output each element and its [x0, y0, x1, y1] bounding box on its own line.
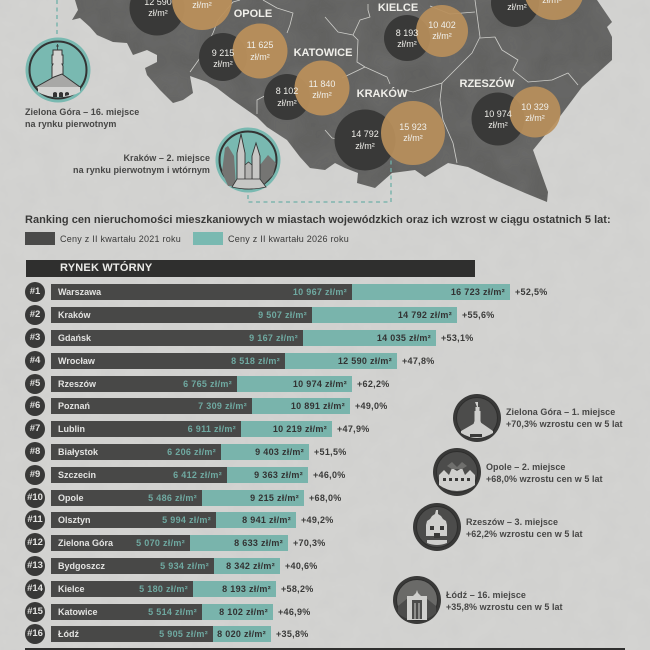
- bubbles: Katowice: 11 840: [309, 79, 335, 89]
- map of Poland: [72, 0, 612, 202]
- row 15 Katowice: +46,9%: [278, 606, 311, 616]
- note: Łódź growth: Łódź – 16. miejsce: [446, 590, 526, 600]
- note: Łódź growth: [446, 590, 563, 612]
- row 9 Szczecin: #9: [30, 469, 40, 480]
- row 8 Białystok: #8: [30, 446, 40, 457]
- icon: Rzeszów, gray: [413, 503, 461, 551]
- row 16 Łódź: Łódź: [58, 629, 79, 639]
- row 12 Zielona Góra: 5 070 zł/m²: [136, 538, 185, 548]
- row 8 Białystok: +51,5%: [314, 447, 347, 457]
- row 6 Poznań: [25, 396, 388, 416]
- row 4 Wrocław: 12 590 zł/m²: [338, 356, 392, 366]
- row 3 Gdańsk: #3: [30, 332, 40, 343]
- row 11 Olsztyn: 5 994 zł/m²: [162, 515, 211, 525]
- row 7 Lublin: [25, 419, 370, 439]
- row 3 Gdańsk: [25, 328, 474, 348]
- bubbles: Opole: [199, 8, 288, 81]
- row 13 Bydgoszcz: 8 342 zł/m²: [226, 561, 275, 571]
- row 1 Warszawa: 10 967 zł/m²: [293, 287, 347, 297]
- row 5 Rzeszów: +62,2%: [357, 378, 390, 388]
- row 1 Warszawa: Warszawa: [58, 287, 101, 297]
- row 7 Lublin: #7: [30, 423, 40, 434]
- bubbles: Opole: 9 215: [212, 48, 234, 58]
- row 13 Bydgoszcz: Bydgoszcz: [58, 561, 105, 571]
- row 10 Opole: +68,0%: [309, 492, 342, 502]
- row 16 Łódź: 8 020 zł/m²: [217, 629, 266, 639]
- bubbles: Rzeszów: 10 974: [484, 109, 512, 119]
- row 2 Kraków: 9 507 zł/m²: [258, 310, 307, 320]
- row 13 Bydgoszcz: [25, 556, 318, 576]
- row 14 Kielce: Kielce: [58, 584, 85, 594]
- row 9 Szczecin: Szczecin: [58, 470, 96, 480]
- row 12 Zielona Góra: 8 633 zł/m²: [234, 538, 283, 548]
- bubbles: Opole: OPOLE: [234, 8, 272, 20]
- bubbles: Katowice: zł/m²: [277, 98, 297, 108]
- bubbles: Opole: 11 625: [247, 40, 273, 50]
- row 10 Opole: 9 215 zł/m²: [250, 492, 299, 502]
- bubbles: Kielce: zł/m²: [432, 31, 452, 41]
- icon: Zielona Góra, gray: [453, 394, 501, 442]
- bubbles: Rzeszów: zł/m²: [488, 120, 508, 130]
- bubbles: top right city: [491, 0, 584, 27]
- note: Rzeszów growth: Rzeszów – 3. miejsce: [466, 517, 558, 527]
- row 15 Katowice: 5 514 zł/m²: [148, 606, 197, 616]
- row 14 Kielce: +58,2%: [281, 584, 314, 594]
- row 16 Łódź: 5 905 zł/m²: [159, 629, 208, 639]
- row 16 Łódź: +35,8%: [276, 629, 309, 639]
- note: Opole growth: Opole – 2. miejsce: [486, 462, 565, 472]
- bubbles: Kielce: KIELCE: [378, 2, 418, 14]
- row 15 Katowice: 8 102 zł/m²: [219, 606, 268, 616]
- row 5 Rzeszów: Rzeszów: [58, 378, 96, 388]
- row 5 Rzeszów: 6 765 zł/m²: [183, 378, 232, 388]
- row 10 Opole: #10: [27, 492, 43, 502]
- row 11 Olsztyn: [25, 510, 334, 530]
- bubbles: top left city: [130, 0, 232, 36]
- row 1 Warszawa: +52,5%: [515, 287, 548, 297]
- note: Zielona Góra growth: +70,3% wzrostu cen w 5 lat: [506, 419, 623, 429]
- row 2 Kraków: 14 792 zł/m²: [398, 310, 452, 320]
- note: Rzeszów growth: +62,2% wzrostu cen w 5 lat: [466, 529, 583, 539]
- row 16 Łódź: [25, 624, 309, 644]
- bottom section bar: [25, 648, 625, 650]
- row 6 Poznań: Poznań: [58, 401, 90, 411]
- row 10 Opole: [25, 488, 342, 508]
- bubbles: Kielce: 10 402: [428, 20, 456, 30]
- row 5 Rzeszów: #5: [30, 378, 40, 388]
- note: Zielona Góra growth: Zielona Góra – 1. miejsce: [506, 407, 615, 417]
- note: Opole growth: +68,0% wzrostu cen w 5 lat: [486, 474, 603, 484]
- row 7 Lublin: Lublin: [58, 424, 85, 434]
- note: Rzeszów growth: [466, 517, 583, 539]
- row 8 Białystok: [25, 442, 347, 462]
- bubbles: Kraków: KRAKÓW: [357, 87, 408, 100]
- bubbles: Opole: zł/m²: [213, 59, 233, 69]
- bubbles: Rzeszów: [460, 77, 560, 146]
- row 13 Bydgoszcz: 5 934 zł/m²: [160, 561, 209, 571]
- row 12 Zielona Góra: #12: [27, 537, 43, 548]
- row 3 Gdańsk: +53,1%: [441, 333, 474, 343]
- bubbles: Rzeszów: zł/m²: [525, 113, 545, 123]
- bubbles: Kraków: zł/m²: [403, 133, 423, 143]
- legend: Ceny z II kwartału 2026 roku: [228, 234, 349, 244]
- bubbles: top left city: zł/m²: [148, 8, 168, 18]
- row 2 Kraków: Kraków: [58, 310, 91, 320]
- ranking title: Ranking cen nieruchomości mieszkaniowych w miastach wojewódzkich oraz ich wzrost w ciągu ostatnich 5 lat:: [25, 214, 611, 226]
- note: Zielona Góra growth: [506, 407, 623, 429]
- row 15 Katowice: #15: [27, 606, 43, 616]
- dashed connector: Kraków: [248, 160, 391, 202]
- note: Opole growth: [486, 462, 603, 484]
- dashed connector: Zielona Góra: [56, 0, 58, 35]
- row 8 Białystok: 6 206 zł/m²: [167, 447, 216, 457]
- row 9 Szczecin: 9 363 zł/m²: [254, 470, 303, 480]
- bubbles: Kraków: [334, 87, 445, 170]
- row 7 Lublin: +47,9%: [337, 424, 370, 434]
- row 11 Olsztyn: #11: [27, 514, 43, 525]
- row 14 Kielce: 8 193 zł/m²: [222, 584, 271, 594]
- row 4 Wrocław: #4: [30, 355, 40, 366]
- row 5 Rzeszów: [25, 374, 390, 394]
- row 15 Katowice: [25, 602, 311, 622]
- icon: Kraków basilica, teal: [216, 128, 280, 192]
- row 4 Wrocław: 8 518 zł/m²: [231, 356, 280, 366]
- row 7 Lublin: 10 219 zł/m²: [273, 424, 327, 434]
- row 10 Opole: 5 486 zł/m²: [148, 492, 197, 502]
- caption: Kraków primary and secondary market: [73, 153, 210, 175]
- bubbles: top right city: zł/m²: [507, 2, 527, 12]
- row 12 Zielona Góra: Zielona Góra: [58, 538, 113, 548]
- bubbles: Kraków: 14 792: [351, 129, 379, 139]
- bubbles: Opole: zł/m²: [250, 52, 270, 62]
- bubbles: Kraków: zł/m²: [355, 141, 375, 151]
- row 4 Wrocław: Wrocław: [58, 356, 95, 366]
- row 2 Kraków: [25, 305, 495, 325]
- bubbles: Katowice: zł/m²: [312, 90, 332, 100]
- legend: Ceny z II kwartału 2021 roku: [60, 234, 181, 244]
- section header: rynek wtórny: [26, 260, 475, 277]
- caption: Kraków primary and secondary market: Kraków – 2. miejsce: [124, 153, 210, 163]
- row 13 Bydgoszcz: #13: [27, 560, 43, 571]
- note: Łódź growth: +35,8% wzrostu cen w 5 lat: [446, 602, 563, 612]
- row 8 Białystok: Białystok: [58, 447, 98, 457]
- section header: rynek wtórny: RYNEK WTÓRNY: [60, 262, 152, 274]
- row 1 Warszawa: #1: [30, 286, 40, 297]
- icon: Opole, gray: [433, 448, 481, 496]
- row 12 Zielona Góra: [25, 533, 326, 553]
- bubbles: Katowice: [264, 47, 352, 120]
- row 3 Gdańsk: 14 035 zł/m²: [377, 333, 431, 343]
- bubbles: Katowice: KATOWICE: [294, 47, 352, 59]
- bubbles: Kielce: zł/m²: [397, 39, 417, 49]
- bubbles: Kraków: 15 923: [399, 122, 427, 132]
- row 11 Olsztyn: 8 941 zł/m²: [242, 515, 291, 525]
- bubbles: Rzeszów: RZESZÓW: [460, 77, 515, 90]
- row 3 Gdańsk: Gdańsk: [58, 333, 91, 343]
- row 9 Szczecin: +46,0%: [313, 470, 346, 480]
- row 11 Olsztyn: +49,2%: [301, 515, 334, 525]
- bubbles: Kielce: 8 193: [396, 28, 418, 38]
- row 5 Rzeszów: 10 974 zł/m²: [293, 378, 347, 388]
- caption: Zielona Góra primary market: na rynku pierwotnym: [25, 119, 116, 129]
- row 2 Kraków: +55,6%: [462, 310, 495, 320]
- row 10 Opole: Opole: [58, 492, 84, 502]
- row 1 Warszawa: 16 723 zł/m²: [451, 287, 505, 297]
- row 4 Wrocław: [25, 351, 435, 371]
- row 6 Poznań: 7 309 zł/m²: [198, 401, 247, 411]
- row 6 Poznań: #6: [30, 400, 40, 411]
- row 16 Łódź: #16: [27, 628, 43, 639]
- bubbles: Rzeszów: 10 329: [521, 102, 549, 112]
- icon: Łódź, gray: [393, 576, 441, 624]
- bubbles: top left city: zł/m²: [192, 0, 212, 10]
- row 3 Gdańsk: 9 167 zł/m²: [249, 333, 298, 343]
- row 9 Szczecin: [25, 465, 346, 485]
- row 6 Poznań: 10 891 zł/m²: [291, 401, 345, 411]
- row 14 Kielce: [25, 579, 314, 599]
- row 1 Warszawa: [25, 282, 548, 302]
- row 2 Kraków: #2: [30, 309, 40, 320]
- row 4 Wrocław: +47,8%: [402, 356, 435, 366]
- row 8 Białystok: 9 403 zł/m²: [255, 447, 304, 457]
- row 14 Kielce: #14: [27, 583, 43, 594]
- row 9 Szczecin: 6 412 zł/m²: [173, 470, 222, 480]
- bubbles: Kielce: [378, 2, 468, 61]
- row 6 Poznań: +49,0%: [355, 401, 388, 411]
- row 14 Kielce: 5 180 zł/m²: [139, 584, 188, 594]
- row 15 Katowice: Katowice: [58, 606, 98, 616]
- caption: Zielona Góra primary market: [25, 107, 139, 129]
- row 12 Zielona Góra: +70,3%: [293, 538, 326, 548]
- bubbles: Katowice: 8 102: [276, 86, 298, 96]
- row 11 Olsztyn: Olsztyn: [58, 515, 91, 525]
- legend: [25, 232, 349, 245]
- caption: Zielona Góra primary market: Zielona Góra – 16. miejsce: [25, 107, 139, 117]
- row 13 Bydgoszcz: +40,6%: [285, 561, 318, 571]
- caption: Kraków primary and secondary market: na rynku pierwotnym i wtórnym: [73, 165, 210, 175]
- icon: Zielona Góra town hall, teal: [26, 38, 90, 102]
- row 7 Lublin: 6 911 zł/m²: [188, 424, 236, 434]
